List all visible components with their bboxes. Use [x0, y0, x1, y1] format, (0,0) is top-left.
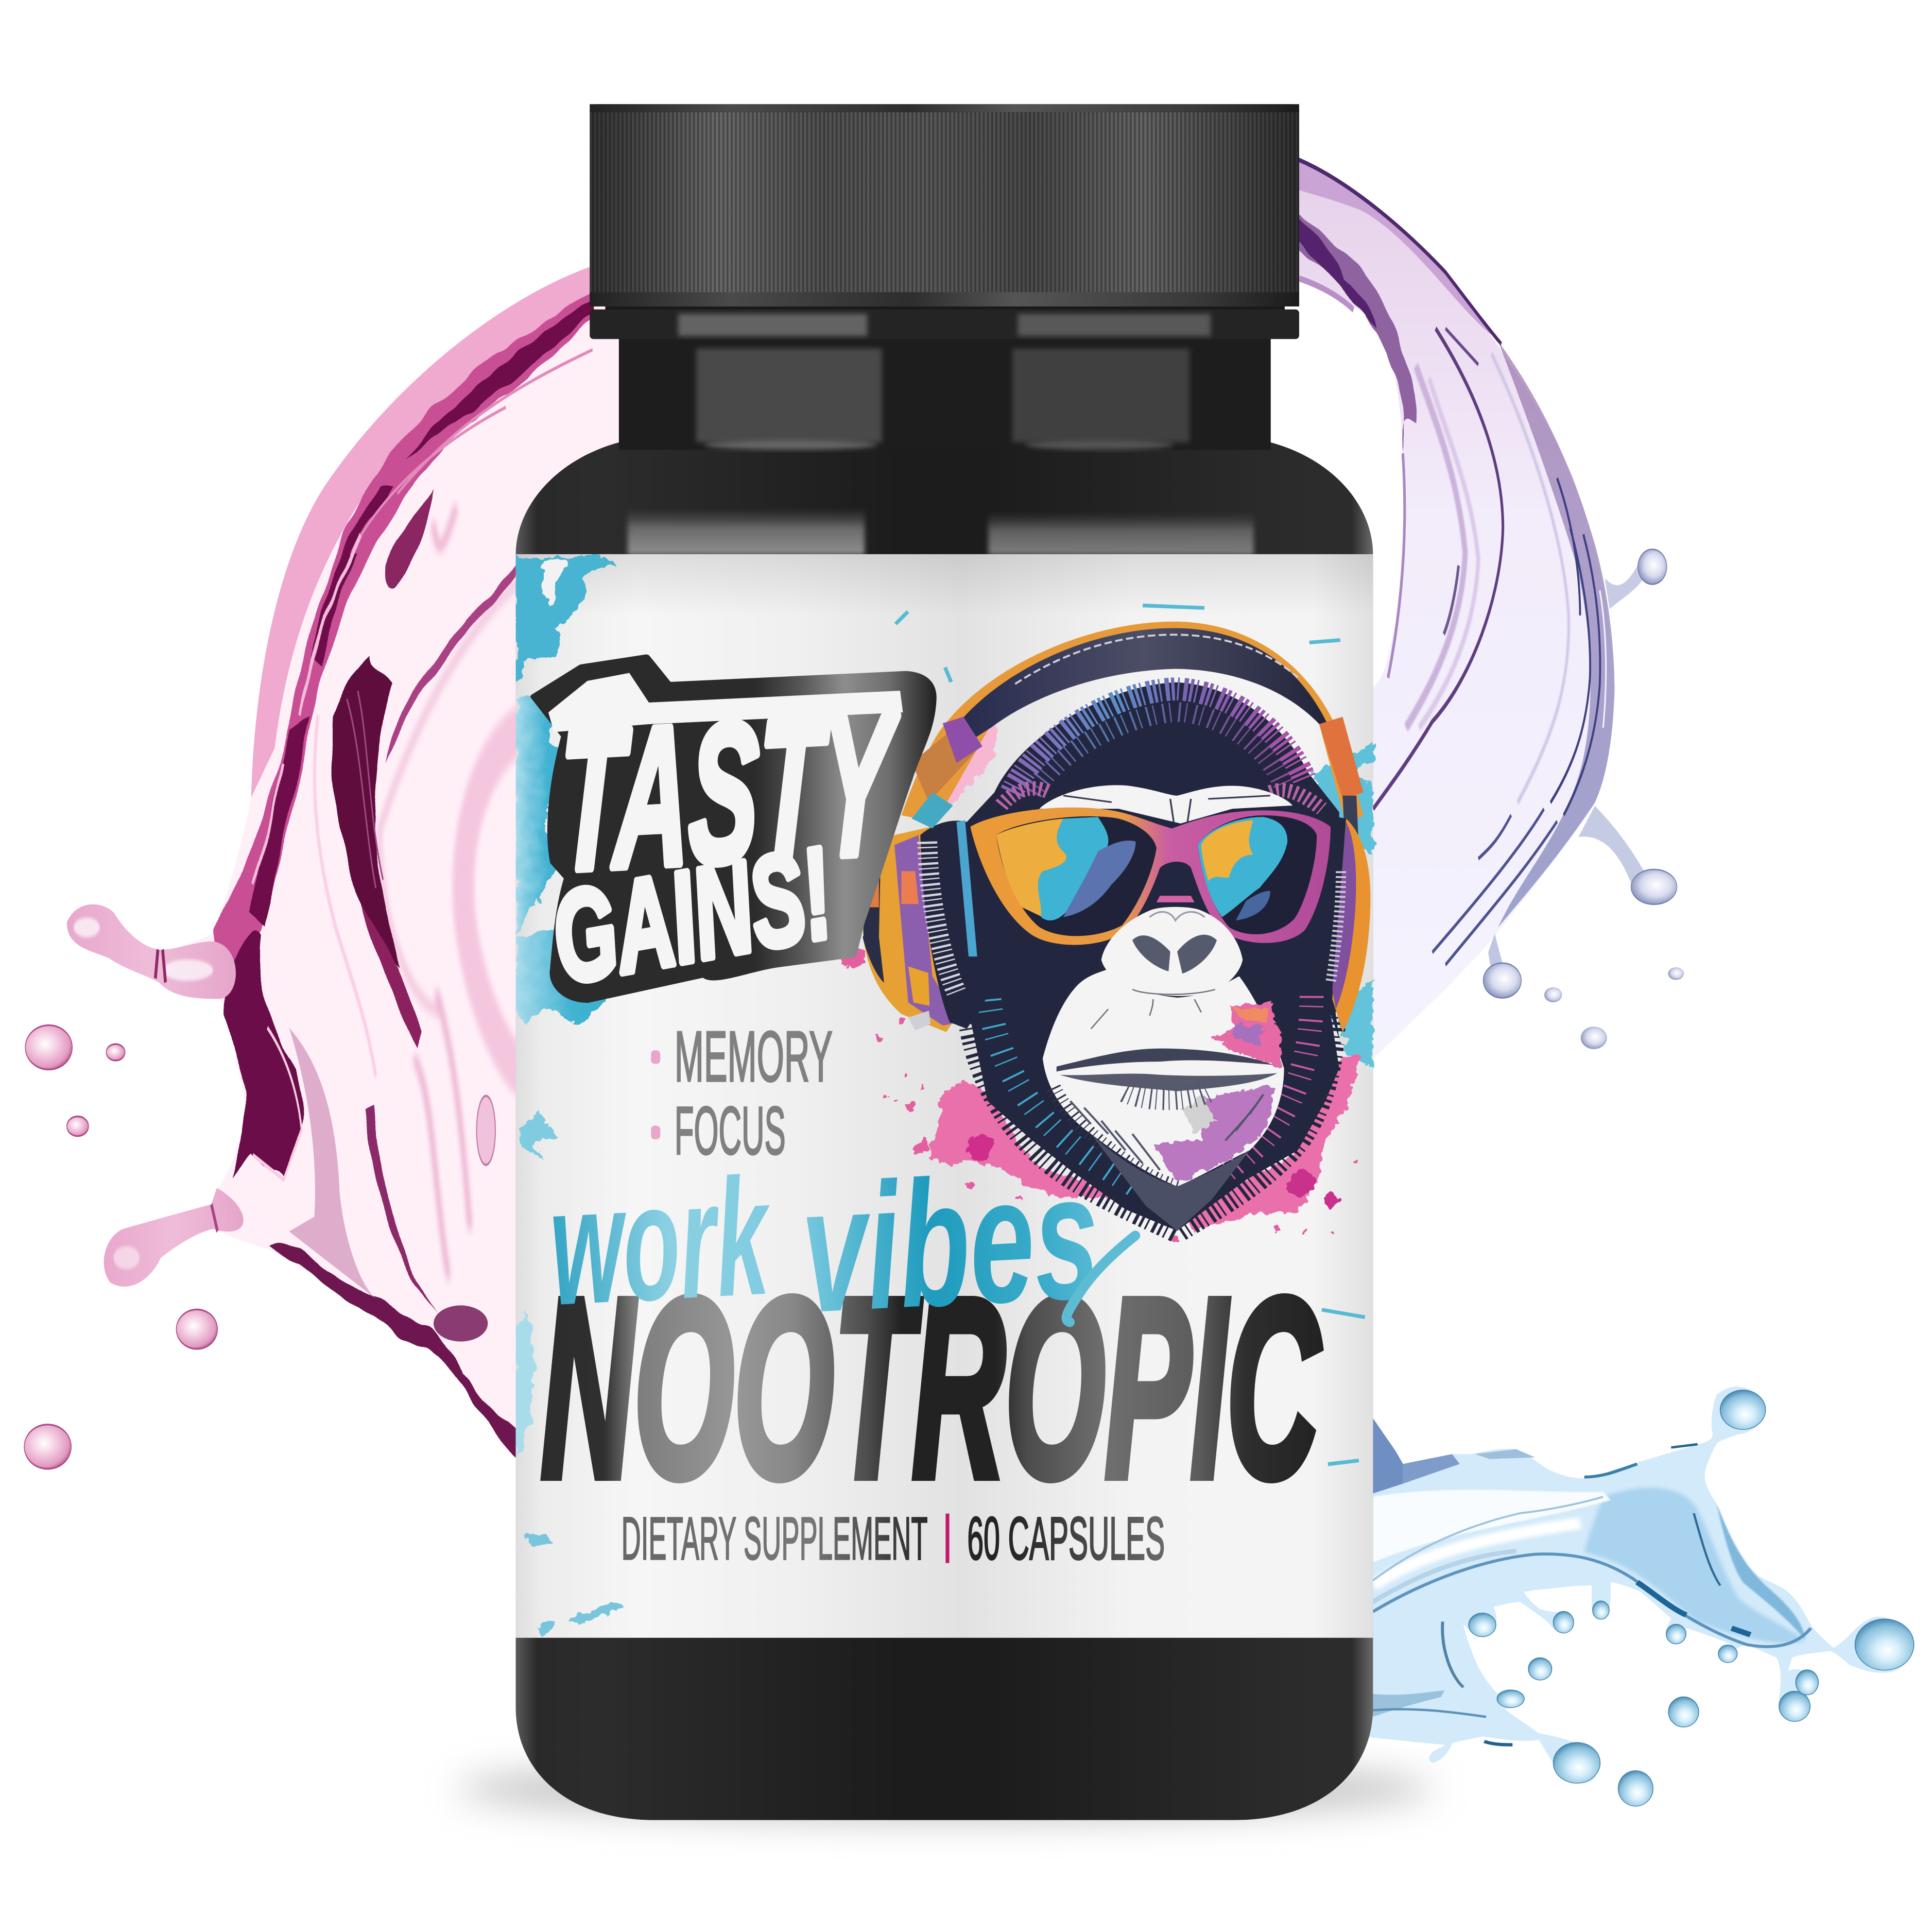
bottle [515, 104, 1373, 1820]
right lens [1198, 815, 1317, 934]
bottle neck [619, 338, 1271, 450]
nose [1101, 896, 1243, 996]
splatter [841, 704, 1373, 1243]
ear cup left [863, 792, 994, 1032]
head fur [967, 682, 1339, 1231]
brand logo: GAINS! [542, 820, 842, 1011]
pink liquid splash [24, 266, 686, 1469]
supplement line: DIETARY SUPPLEMENT [622, 1504, 928, 1572]
blue droplets [1469, 1390, 1914, 1806]
benefit: focus [651, 1093, 786, 1169]
pink arms [67, 904, 236, 999]
neck ring [590, 304, 1299, 339]
pink droplets [24, 1025, 217, 1469]
product label [515, 554, 1373, 1638]
left lens [996, 816, 1157, 936]
benefit list [651, 1017, 833, 1169]
cap [590, 104, 1299, 306]
purple liquid splash [1281, 153, 1684, 1058]
brand logo: TASTY [558, 673, 901, 912]
mouth [1057, 1049, 1274, 1071]
sunglasses [970, 808, 1331, 945]
purple droplets and arms [1605, 562, 1649, 609]
muzzle [1043, 970, 1284, 1187]
script tagline: vibes [797, 1135, 1104, 1350]
script tagline: work [545, 1142, 778, 1340]
pink rim ribbons [213, 292, 593, 978]
product label: 60 CAPSULES [967, 1504, 1165, 1572]
benefit list: FOCUS [675, 1093, 786, 1169]
ear cup right [1325, 815, 1370, 1045]
fur comb edge [969, 986, 1333, 1231]
label paint splashes [515, 556, 1365, 1633]
ground shadow [457, 1757, 1433, 1821]
benefit: memory [651, 1017, 833, 1097]
dark swirl patches [224, 485, 516, 1459]
script tagline [545, 1135, 1135, 1350]
brand logo [535, 657, 933, 1011]
hair comb [1012, 689, 1305, 792]
beard [1091, 1134, 1250, 1231]
pink soft folds [380, 510, 516, 1274]
blue liquid splash [1361, 1387, 1914, 1806]
headband [901, 622, 1364, 871]
purple inner strokes [1373, 329, 1503, 809]
shoulder highlights [628, 510, 1254, 555]
purple outer band [1498, 341, 1614, 928]
gorilla with headphones [841, 622, 1373, 1243]
brow [1039, 785, 1292, 824]
purple dark ribbon [1295, 210, 1416, 453]
bottle body [516, 442, 1373, 1820]
product label: MEMORY [675, 1017, 833, 1097]
